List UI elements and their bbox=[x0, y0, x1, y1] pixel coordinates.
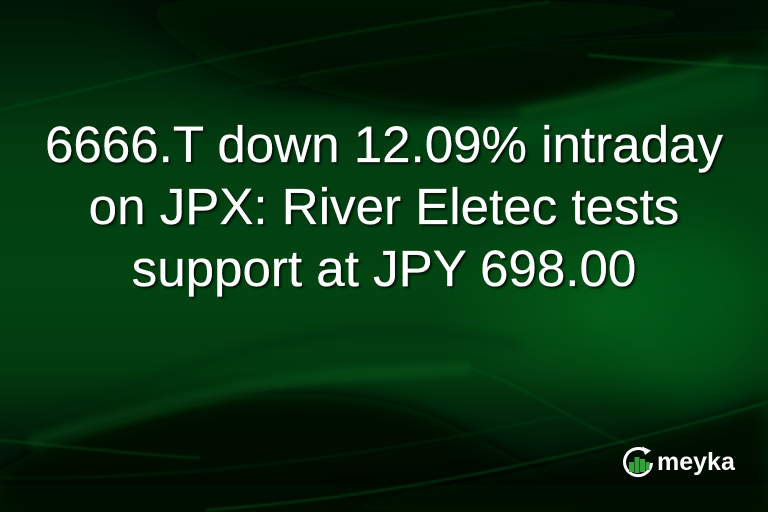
title: on JPX: River Eletec tests bbox=[89, 178, 679, 235]
logo: meyka bbox=[622, 446, 736, 478]
title: 6666.T down 12.09% intraday bbox=[45, 116, 723, 173]
icon: circle with bars bbox=[625, 446, 652, 476]
title: support at JPY 698.00 bbox=[132, 240, 636, 297]
wordmark: meyka bbox=[657, 448, 736, 476]
title bbox=[45, 116, 725, 300]
